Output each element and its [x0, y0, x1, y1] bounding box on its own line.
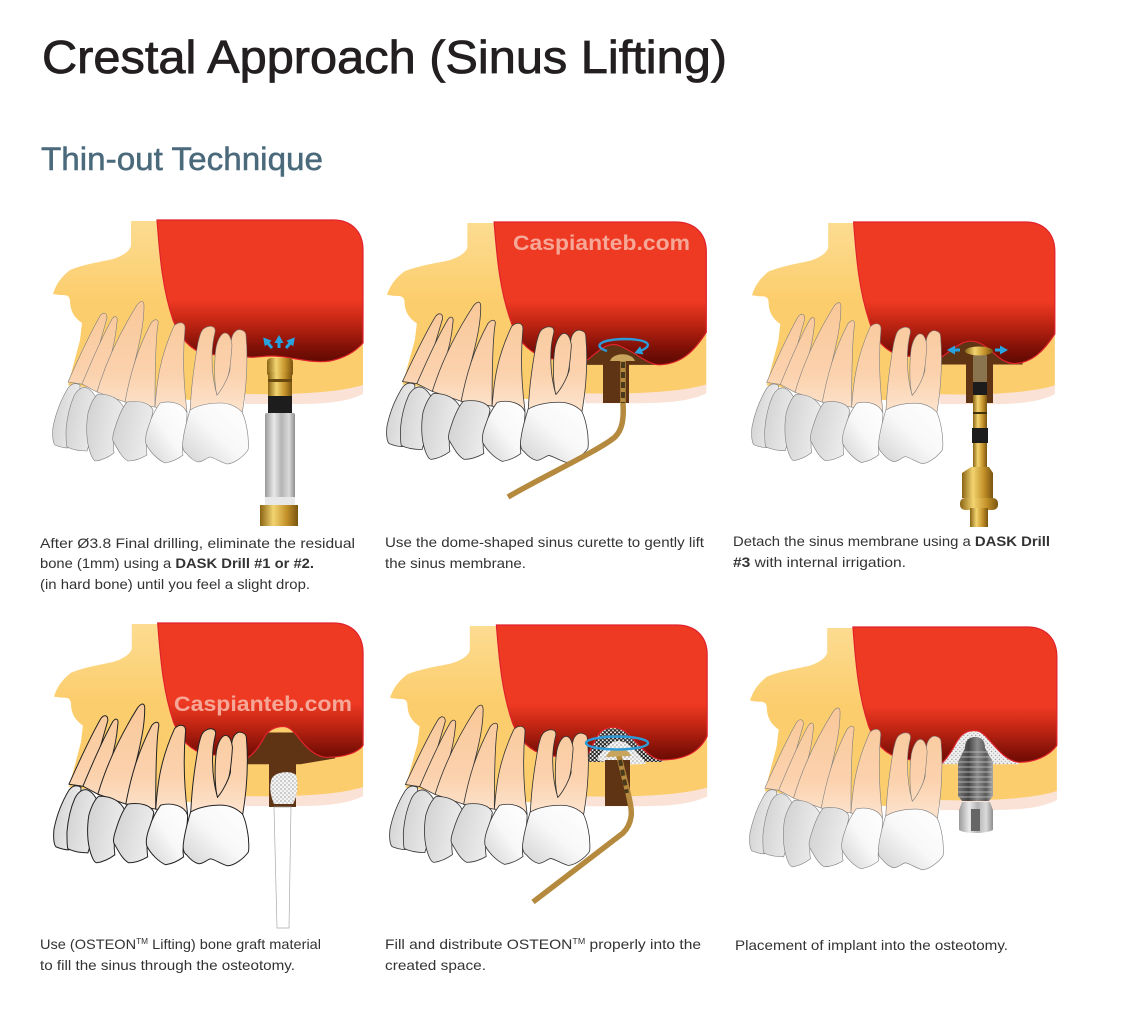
title: Crestal Approach (Sinus Lifting): [42, 31, 727, 83]
sinus curette: [533, 749, 631, 902]
caption step 5: created space.: [385, 957, 486, 973]
subtitle: Thin-out Technique: [41, 141, 323, 177]
caption step 1: After Ø3.8 Final drilling, eliminate the residual: [40, 535, 355, 551]
panel: step 2 sinus curette: [385, 222, 706, 571]
osteotomy channel: [966, 360, 993, 403]
panel: step 4 bone graft: [40, 623, 363, 973]
panel: step 6 implant placement: [735, 627, 1057, 953]
caption step 4: Use (OSTEON: [40, 936, 133, 952]
caption step 5: properly into the: [585, 936, 701, 952]
illustration: jaw, sinus and teeth: [390, 625, 707, 865]
caption step 4: [40, 936, 321, 973]
caption step 6: Placement of implant into the osteotomy.: [735, 937, 1008, 953]
syringe tip: [274, 807, 291, 928]
caption step 2: [385, 534, 704, 571]
caption step 1: (in hard bone) until you feel a slight drop.: [40, 576, 310, 592]
caption step 4: to fill the sinus through the osteotomy.: [40, 957, 295, 973]
osteotomy channel: [603, 360, 629, 403]
DASK drill: [960, 346, 998, 527]
caption step 2: the sinus membrane.: [385, 555, 526, 571]
caption step 1: bone (1mm) using a DASK Drill #1 or #2.: [40, 555, 314, 571]
caption step 3: #3 with internal irrigation.: [733, 554, 906, 570]
icon: blue rotation ring: [599, 339, 648, 351]
sinus curette: [508, 354, 635, 497]
caption step 5: [385, 936, 701, 973]
panel: step 5 distribute graft: [385, 625, 707, 973]
watermark: Caspianteb.com: [174, 693, 352, 716]
illustration: jaw, sinus and teeth: [752, 222, 1055, 464]
bone graft granules: [270, 772, 297, 804]
watermark: Caspianteb.com: [513, 232, 690, 255]
caption step 5: Fill and distribute OSTEON: [385, 936, 554, 952]
illustration: jaw, sinus and teeth: [54, 623, 363, 866]
illustration: jaw, sinus and teeth: [387, 222, 706, 462]
dental implant: [958, 737, 993, 833]
icon: blue arrows: [953, 348, 1002, 352]
illustration: jaw, sinus and teeth: [750, 627, 1057, 870]
panel: step 3 DASK drill: [733, 222, 1055, 570]
osteotomy channel: [269, 760, 296, 807]
caption step 3: [733, 533, 1050, 570]
drill with handpiece: [260, 358, 298, 526]
caption step 5: TM: [572, 937, 586, 946]
icon: blue arrows: [267, 341, 291, 348]
osteotomy channel: [605, 760, 630, 806]
caption step 1: [40, 535, 355, 592]
graft inner layer: [597, 741, 646, 765]
illustration: jaw, sinus and teeth: [53, 220, 363, 464]
caption step 2: Use the dome-shaped sinus curette to gently lift: [385, 534, 704, 550]
icon: blue rotation ring: [586, 736, 648, 750]
caption step 3: Detach the sinus membrane using a DASK Drill: [733, 533, 1050, 549]
caption step 4: Lifting) bone graft material: [148, 936, 321, 952]
panel: step 1 residual bone drilling: [40, 220, 363, 592]
caption step 4: TM: [136, 937, 148, 946]
